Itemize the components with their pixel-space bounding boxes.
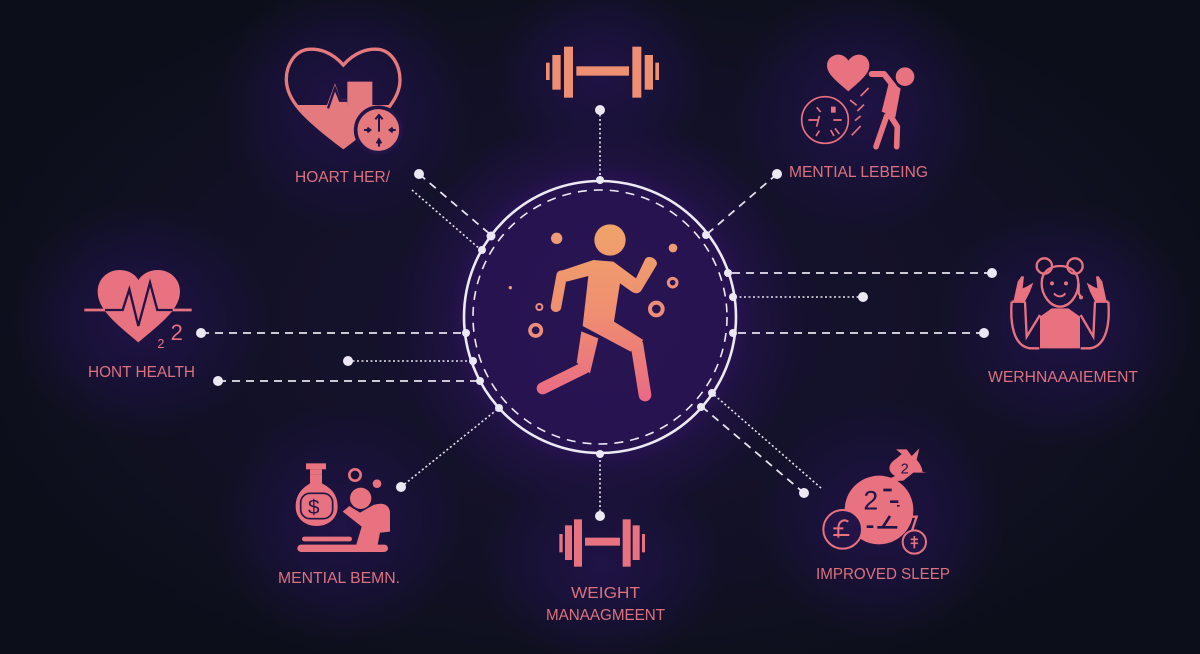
icon: heart with pulse: 2 (171, 320, 183, 345)
icon: person with headset (1011, 258, 1109, 348)
connector dots (196, 105, 997, 521)
icon: moon sleep: 2 (901, 461, 909, 477)
label: weight management: MANAAGMEENT (546, 607, 665, 624)
icon: moon sleep: 2 (863, 485, 878, 515)
icon: heart with pulse (84, 270, 192, 351)
icon: central runner (509, 224, 677, 395)
label: weight management right: WERHNAAAIEMENT (988, 369, 1138, 386)
connector lines (201, 110, 992, 516)
icon: heart with pulse: 2 (157, 337, 164, 351)
label: improved sleep: IMPROVED SLEEP (816, 566, 950, 583)
icon: moon sleep (823, 448, 927, 554)
icon: bottle and reclining figure: $ (308, 496, 320, 519)
label: mental bemn: MENTIAL BEMN. (278, 570, 400, 587)
icon: heart outline with clock (280, 49, 407, 153)
icon: bottle and reclining figure (296, 463, 390, 552)
central ring (464, 181, 736, 453)
label: weight management (546, 585, 665, 624)
label: heart: HOART HER/ (295, 169, 391, 186)
icon: top dumbbell (546, 47, 659, 98)
label: heart health: HONT HEALTH (88, 364, 195, 381)
icon: heart and figure (802, 55, 914, 147)
icon: bottom dumbbell (559, 519, 645, 567)
label: mental wellbeing: MENTIAL LEBEING (789, 164, 928, 181)
label: weight management: WEIGHT (571, 585, 640, 602)
